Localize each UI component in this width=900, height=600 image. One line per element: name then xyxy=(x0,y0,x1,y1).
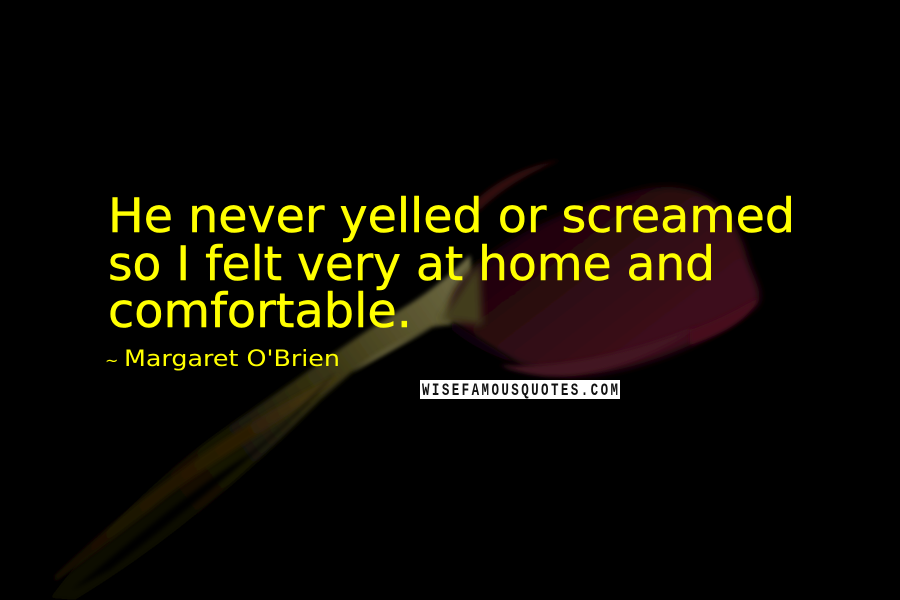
tulip stem xyxy=(50,255,478,600)
quote text: He never yelled or screamed xyxy=(108,189,795,244)
quote text: comfortable. xyxy=(108,284,412,339)
quote text xyxy=(108,189,795,339)
illustration: tulip flower and stem xyxy=(50,160,759,600)
author attribution: ~ xyxy=(105,351,118,370)
author attribution: Margaret O'Brien xyxy=(124,347,340,372)
watermark badge: WISEFAMOUSQUOTES.COM xyxy=(422,380,618,401)
quote text: so I felt very at home and xyxy=(108,237,715,292)
tulip petals xyxy=(440,160,759,376)
